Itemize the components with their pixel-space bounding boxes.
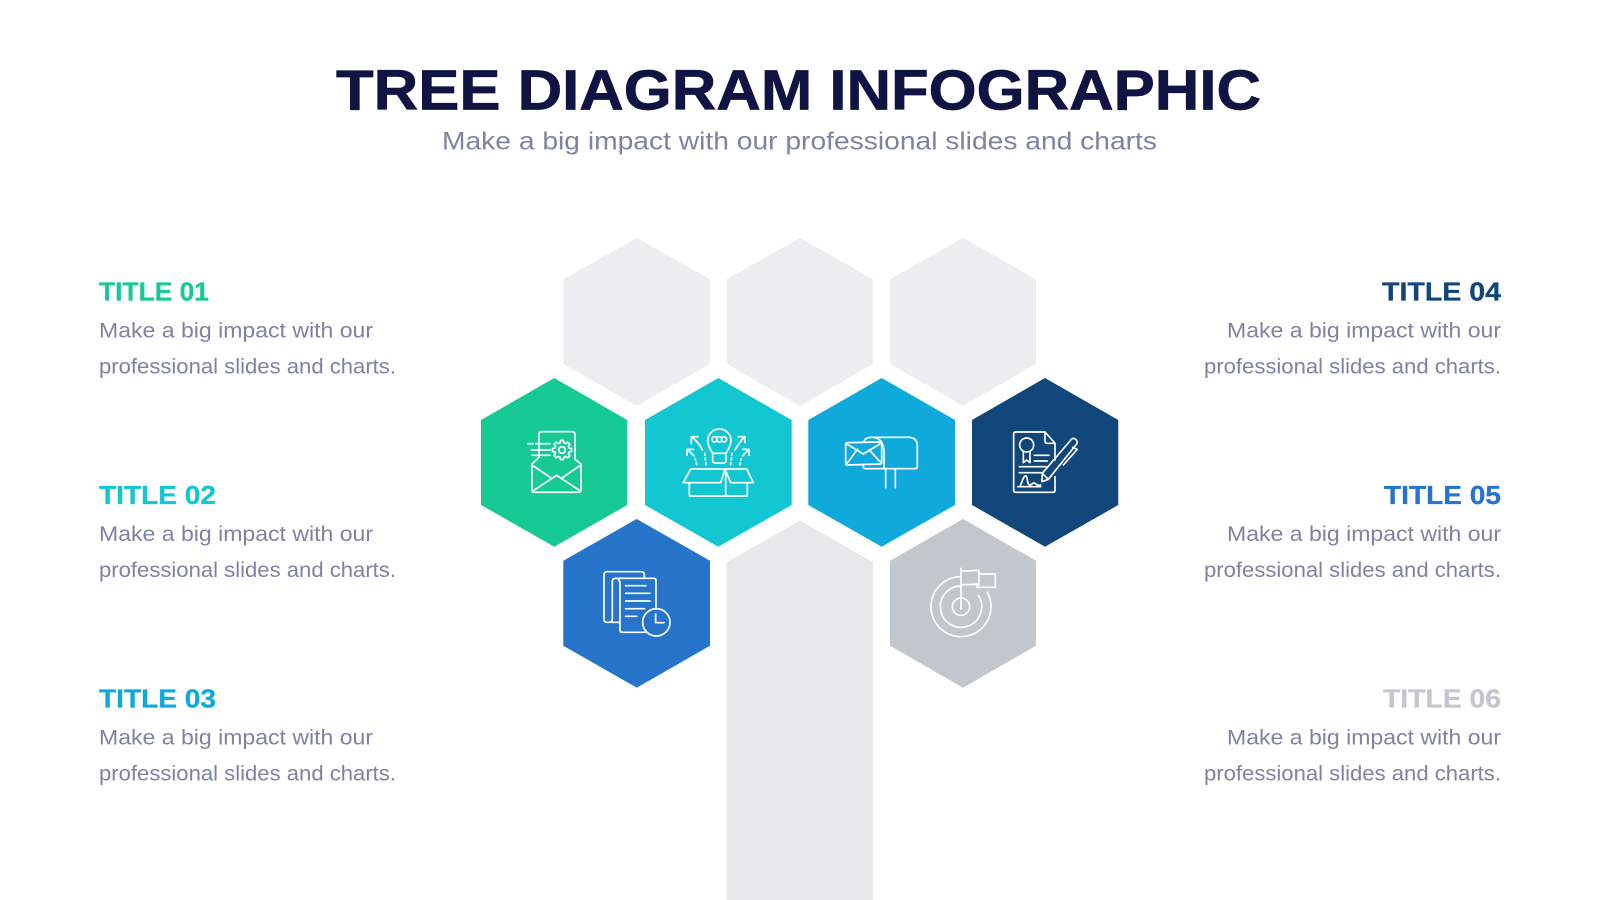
tree trunk: [727, 521, 873, 900]
text block: title 02: [99, 482, 396, 582]
text block: title 03: professional slides and charts.: [99, 762, 396, 785]
hexagon 03 with icon: [808, 378, 955, 547]
text block: title 02: Make a big impact with our: [99, 523, 373, 546]
icon: mailbox with letter: [846, 437, 917, 488]
text block: title 04: [1204, 279, 1502, 379]
hexagon 05 with icon: [563, 519, 710, 688]
text block: title 05: TITLE 05: [1384, 482, 1501, 510]
text block: title 04: TITLE 04: [1382, 279, 1502, 307]
text block: title 01: [99, 279, 396, 379]
tree crown: empty hexagon centre: [727, 238, 873, 406]
text block: title 05: Make a big impact with our: [1227, 523, 1501, 546]
text block: title 02: TITLE 02: [99, 482, 216, 510]
subtitle: Make a big impact with our professional slides and charts: [442, 128, 1157, 156]
icon: signed certificate and pen: [1014, 432, 1077, 492]
hexagon 06 with icon: [890, 519, 1036, 688]
text block: title 01: professional slides and charts.: [99, 356, 396, 379]
text block: title 04: professional slides and charts.: [1204, 356, 1501, 379]
icon: target with flag: [931, 568, 995, 637]
icon: light bulb rising from box: [683, 429, 753, 496]
title: TREE DIAGRAM INFOGRAPHIC: [336, 58, 1261, 122]
text block: title 01: TITLE 01: [99, 279, 209, 307]
hexagon 02 with icon: [645, 378, 792, 547]
text block: title 02: professional slides and charts.: [99, 559, 396, 582]
text block: title 05: professional slides and charts.: [1204, 559, 1501, 582]
hexagon 01 with icon: [481, 378, 627, 547]
tree crown: empty hexagon right: [890, 238, 1036, 406]
text block: title 06: [1204, 686, 1501, 785]
text block: title 06: professional slides and charts.: [1204, 762, 1501, 785]
icon: documents with clock: [604, 572, 670, 636]
icon: envelope with gear document: [528, 432, 581, 492]
text block: title 03: TITLE 03: [99, 686, 216, 714]
text block: title 01: Make a big impact with our: [99, 320, 373, 343]
hexagon 04 with icon: [972, 378, 1118, 547]
text block: title 06: Make a big impact with our: [1227, 726, 1501, 749]
text block: title 03: [99, 686, 396, 785]
tree crown: empty hexagon left: [563, 238, 710, 406]
text block: title 05: [1204, 482, 1501, 582]
text block: title 06: TITLE 06: [1383, 686, 1501, 714]
text block: title 04: Make a big impact with our: [1227, 320, 1501, 343]
text block: title 03: Make a big impact with our: [99, 726, 373, 749]
